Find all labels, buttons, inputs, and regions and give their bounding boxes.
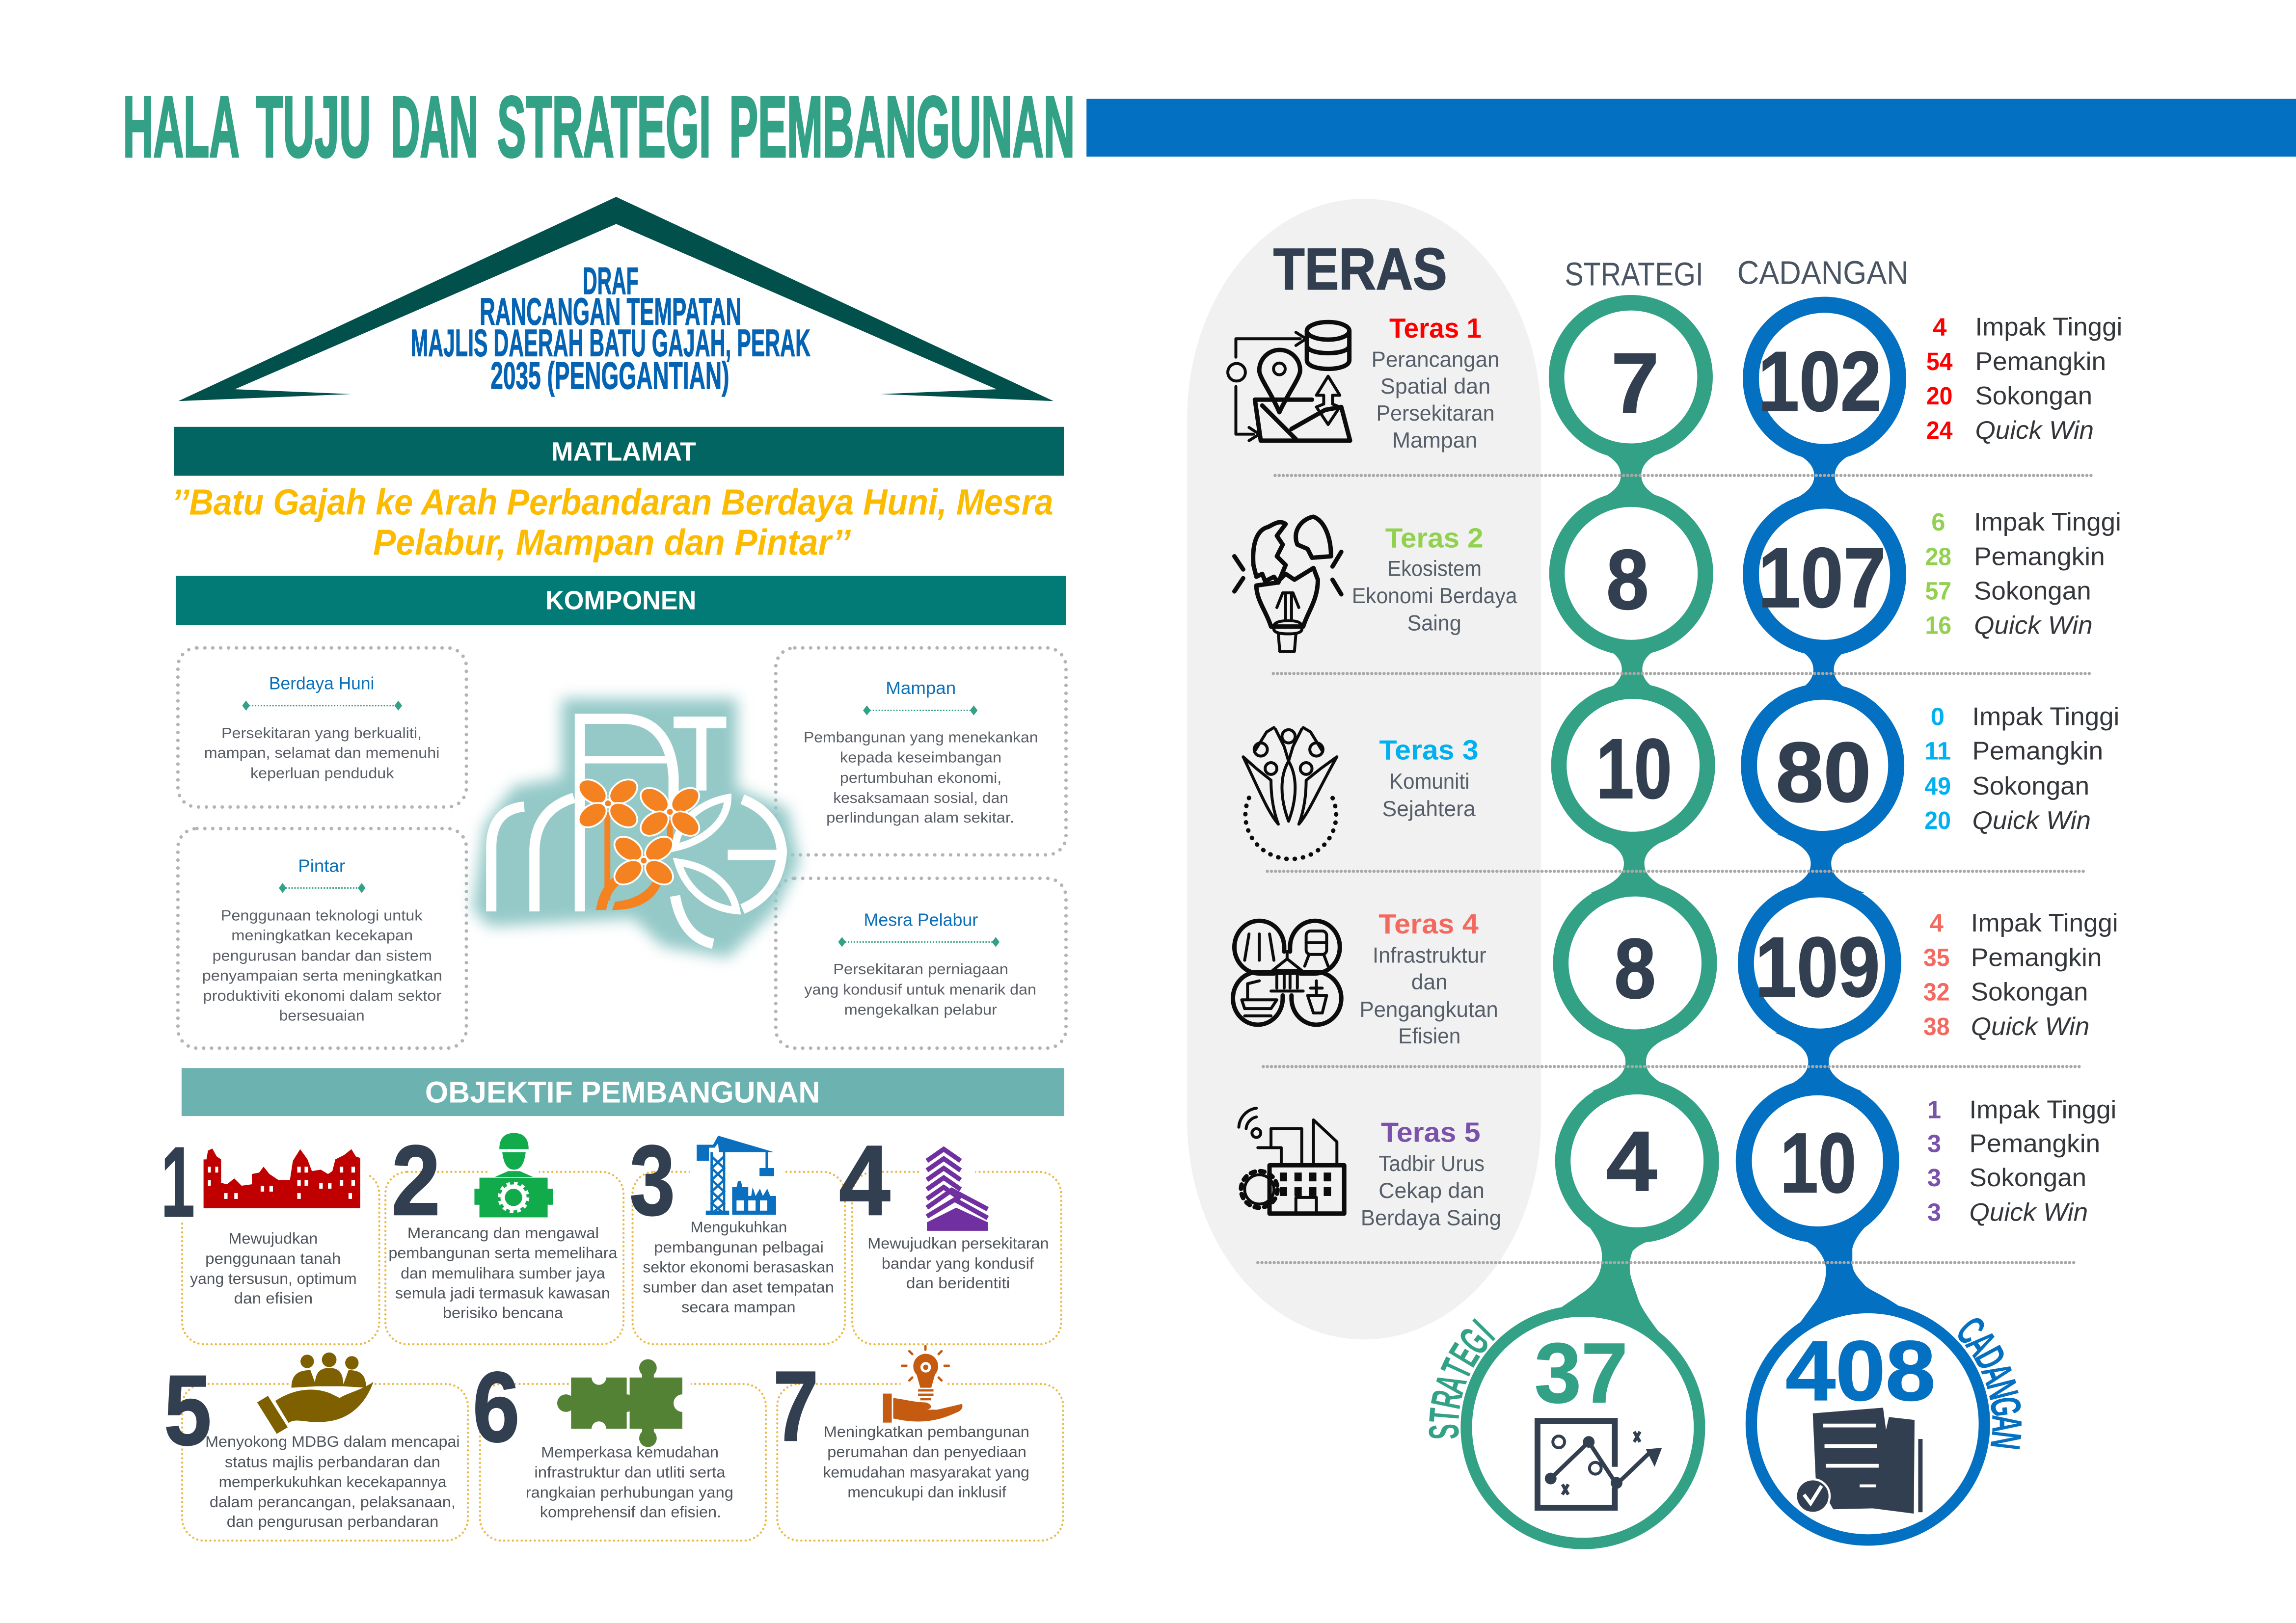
objective 5 text: status majlis perbandaran dan <box>225 1453 440 1470</box>
teras 1 breakdown: Impak Tinggi <box>1975 313 2122 342</box>
card: Mesra Pelabur <box>776 878 1066 1048</box>
teras 2 row: Teras 2 <box>1385 523 1484 554</box>
strategi 7: 7 <box>1611 335 1659 430</box>
teras 1 description <box>1372 347 1499 452</box>
card: Mesra Pelabur: Persekitaran perniagaan <box>833 960 1008 978</box>
objective 2 text: berisiko bencana <box>443 1304 563 1321</box>
teras 1 breakdown: Pemangkin <box>1975 347 2106 376</box>
objective boxes outlines <box>176 1164 1063 1541</box>
icon: planning map <box>1228 322 1350 441</box>
teras 2 breakdown: 6 <box>1931 508 1945 536</box>
teras 5 breakdown <box>1927 1096 2116 1227</box>
curved label strategi: I <box>1465 1311 1503 1349</box>
curved label cadangan: N <box>1981 1429 2030 1452</box>
curved label strategi: A <box>1426 1368 1476 1399</box>
icon: community people <box>1243 727 1337 859</box>
objective 5 text: dan pengurusan perbandaran <box>227 1513 438 1530</box>
objective 7 text: mencukupi dan inklusif <box>847 1483 1006 1501</box>
strategi 8 <box>1561 889 1709 1037</box>
curved label cadangan: A <box>1957 1323 2006 1364</box>
teras 4 description: Infrastruktur <box>1373 943 1486 967</box>
strategi chain <box>1555 303 1711 1332</box>
cadangan column heading: CADANGAN <box>1737 255 1909 292</box>
teras 1 row <box>1228 313 2122 452</box>
roof shape <box>178 197 1053 401</box>
objective 5: 5 <box>164 1354 212 1465</box>
objective 1: 1 <box>161 1126 195 1237</box>
goal quote: Pelabur, Mampan dan Pintar’’ <box>373 522 851 562</box>
curved label cadangan: A <box>1983 1414 2031 1433</box>
teras 5 breakdown: 3 <box>1927 1164 1941 1192</box>
card: Mampan <box>776 648 1066 855</box>
objective 6 text <box>526 1443 733 1520</box>
teras 5 description: Berdaya Saing <box>1361 1206 1501 1230</box>
komponen banner <box>176 576 1066 625</box>
cadangan 109 <box>1746 889 1893 1037</box>
teras 1 description: Perancangan <box>1372 347 1499 372</box>
objective 4 text: bandar yang kondusif <box>882 1254 1034 1272</box>
total cadangan circle: 408 <box>1785 1323 1936 1418</box>
total strategi circle: 37 <box>1535 1325 1628 1420</box>
curved label strategi: G <box>1450 1319 1498 1363</box>
cadangan 80 <box>1749 692 1896 839</box>
objective 4 text: Mewujudkan persekitaran <box>867 1234 1049 1252</box>
objective 5 text: Menyokong MDBG dalam mencapai <box>205 1433 460 1450</box>
objective 4: 4 <box>839 1124 891 1236</box>
main title: STRATEGI <box>497 79 711 175</box>
card: Berdaya Huni: Berdaya Huni <box>269 674 374 693</box>
objective 7 text: Meningkatkan pembangunan <box>824 1423 1029 1440</box>
objective 3 text: pembangunan pelbagai <box>654 1238 824 1256</box>
teras 1 breakdown: Sokongan <box>1975 382 2092 410</box>
teras 2 description <box>1352 556 1517 635</box>
roof heading: 2035 (PENGGANTIAN) <box>490 355 729 397</box>
card: Mesra Pelabur: mengekalkan pelabur <box>844 1001 997 1018</box>
objective 4 <box>839 1124 1049 1292</box>
curved label cadangan: G <box>1981 1394 2030 1419</box>
teras 4 row <box>1233 909 2118 1048</box>
strategi 8: 8 <box>1614 921 1656 1016</box>
total strategi circle <box>1466 1311 1700 1543</box>
teras 1 breakdown: 20 <box>1926 382 1953 410</box>
cadangan 102 <box>1751 305 1898 452</box>
card: Berdaya Huni <box>178 648 466 807</box>
card: Mampan: pertumbuhan ekonomi, <box>840 769 1001 786</box>
objective 1 text: dan efisien <box>234 1289 313 1307</box>
strategi 8: 8 <box>1606 532 1649 627</box>
teras 4 breakdown: Quick Win <box>1971 1012 2089 1041</box>
teras 1 description: Spatial dan <box>1380 374 1490 399</box>
objective 1 text: yang tersusun, optimum <box>190 1270 357 1287</box>
teras 2 breakdown: 16 <box>1925 612 1951 639</box>
teras 4 description: dan <box>1411 970 1448 994</box>
objective 6 text: infrastruktur dan utliti serta <box>534 1463 726 1481</box>
left panel <box>161 197 1066 1541</box>
teras 5 description <box>1361 1151 1501 1230</box>
icon: purple tower <box>927 1149 988 1231</box>
teras 1 description: Persekitaran <box>1377 401 1495 426</box>
teras 4 breakdown: Pemangkin <box>1971 943 2102 972</box>
teras 4 breakdown: 32 <box>1923 978 1950 1006</box>
curved label strategi: E <box>1440 1336 1488 1374</box>
card: Mesra Pelabur: yang kondusif untuk menarik dan <box>804 981 1036 998</box>
teras 2 breakdown: Quick Win <box>1974 612 2093 640</box>
icon: engineer with gear board <box>474 1133 553 1217</box>
matlamat banner: MATLAMAT <box>551 437 696 467</box>
icon: crane and factory <box>697 1136 776 1215</box>
objective 6 text: Memperkasa kemudahan <box>541 1443 719 1461</box>
objective 7 text <box>823 1423 1029 1501</box>
teras 3 breakdown <box>1924 702 2119 835</box>
teras 3 breakdown: Impak Tinggi <box>1972 702 2119 731</box>
cadangan 107 <box>1751 501 1898 648</box>
teras 1 description: Mampan <box>1392 428 1477 452</box>
title blue bar <box>1086 99 2296 157</box>
teras 4 breakdown: 4 <box>1930 909 1944 937</box>
teras 5 description: Tadbir Urus <box>1378 1151 1485 1176</box>
teras 5 description: Cekap dan <box>1378 1178 1485 1203</box>
curved label cadangan <box>1947 1307 2031 1452</box>
teras 1 breakdown: Quick Win <box>1975 416 2094 445</box>
teras 2 breakdown: 57 <box>1925 577 1951 605</box>
curved label strategi: S <box>1420 1423 1468 1440</box>
strategi 10: 10 <box>1596 721 1672 816</box>
objective 4 text <box>867 1234 1049 1292</box>
curved label strategi: R <box>1422 1386 1472 1412</box>
objective 6 text: rangkaian perhubungan yang <box>526 1484 733 1501</box>
teras 2 breakdown: 28 <box>1925 542 1951 570</box>
teras 4 row: Teras 4 <box>1378 909 1479 940</box>
teras 5 breakdown: 3 <box>1927 1129 1941 1157</box>
teras 3 breakdown: Quick Win <box>1972 806 2091 835</box>
teras 1 row: Teras 1 <box>1389 313 1482 344</box>
objective 7 text: kemudahan masyarakat yang <box>823 1463 1029 1481</box>
card: Pintar: Pintar <box>298 856 345 876</box>
objective 5 text: memperkukuhkan kecekapannya <box>219 1473 447 1490</box>
cadangan 10 <box>1744 1087 1891 1234</box>
teras 5 breakdown: 3 <box>1927 1198 1941 1226</box>
objective 7: 7 <box>773 1350 818 1462</box>
teras 4 description: Efisien <box>1398 1024 1460 1048</box>
icon: broken light bulb <box>1234 517 1341 651</box>
teras 1 breakdown <box>1926 313 2122 445</box>
teras 3 breakdown: Sokongan <box>1972 772 2089 800</box>
icon: transport network <box>1233 921 1341 1025</box>
teras 4 description: Pengangkutan <box>1360 997 1498 1022</box>
objective 1 text: Mewujudkan <box>228 1229 318 1247</box>
MDBG logo <box>472 698 800 958</box>
goal quote: ’’Batu Gajah ke Arah Perbandaran Berdaya Huni, Mesra <box>172 482 1053 523</box>
objective 3 text: Mengukuhkan <box>691 1218 787 1236</box>
teras 2 row <box>1234 508 2121 651</box>
teras 4 breakdown: Sokongan <box>1971 978 2088 1006</box>
objective 6 <box>473 1351 733 1520</box>
objective 2 text: semula jadi termasuk kawasan <box>395 1284 610 1302</box>
teras 3 description <box>1382 769 1476 821</box>
teras 5 breakdown: Sokongan <box>1970 1164 2086 1192</box>
main title: TUJU <box>256 79 371 175</box>
objective 4 text: dan beridentiti <box>906 1274 1010 1292</box>
objektif banner <box>182 1068 1064 1116</box>
teras 3 breakdown: 49 <box>1924 772 1951 800</box>
curved label cadangan: N <box>1977 1375 2028 1404</box>
card: Berdaya Huni: mampan, selamat dan memenuhi <box>204 744 439 761</box>
icon: hand with light bulb <box>883 1346 962 1423</box>
objective 2 <box>388 1124 618 1321</box>
teras 3 breakdown: 0 <box>1931 702 1945 730</box>
teras 3 row <box>1243 702 2119 859</box>
curved label cadangan: D <box>1966 1339 2016 1377</box>
roof heading: MAJLIS DAERAH BATU GAJAH, PERAK <box>411 322 810 365</box>
card: Berdaya Huni: keperluan penduduk <box>250 764 394 781</box>
teras 3 description: Sejahtera <box>1382 797 1476 821</box>
icon: red city <box>204 1148 360 1208</box>
teras heading: TERAS <box>1273 237 1447 302</box>
curved label strategi: T <box>1420 1407 1468 1425</box>
cadangan 107: 107 <box>1758 530 1886 625</box>
cadangan 80: 80 <box>1776 724 1871 820</box>
objective 2: 2 <box>392 1124 440 1236</box>
teras 5 row: Teras 5 <box>1381 1117 1481 1148</box>
card: Pintar <box>178 828 466 1048</box>
icon: hand holding people <box>257 1353 374 1434</box>
objective 2 text: pembangunan serta memelihara <box>388 1244 618 1262</box>
right panel <box>1187 199 2122 1543</box>
card: Mampan: kesaksamaan sosial, dan <box>833 789 1008 806</box>
strategi 4: 4 <box>1606 1114 1657 1209</box>
roof heading: RANCANGAN TEMPATAN <box>480 291 741 333</box>
objective 6: 6 <box>473 1351 520 1463</box>
card: Pintar: produktiviti ekonomi dalam sektor <box>203 987 441 1004</box>
card: Pintar: pengurusan bandar dan sistem <box>213 947 432 964</box>
objective 3: 3 <box>630 1124 675 1236</box>
teras 2 description: Saing <box>1407 611 1461 635</box>
card: Pintar: Penggunaan teknologi untuk <box>221 906 423 924</box>
icon: strategy board <box>1538 1421 1662 1508</box>
objective 7 text: perumahan dan penyediaan <box>827 1443 1026 1461</box>
objective 5 text <box>205 1433 460 1530</box>
goal quote <box>172 482 1053 562</box>
card: Pintar: meningkatkan kecekapan <box>231 927 413 944</box>
teras 3 breakdown: 20 <box>1924 806 1951 834</box>
card: Mesra Pelabur: Mesra Pelabur <box>864 910 978 930</box>
objective 3 text: secara mampan <box>681 1298 796 1316</box>
objective 3 text: sumber dan aset tempatan <box>643 1278 834 1296</box>
strategi 8 <box>1557 499 1705 648</box>
curved label cadangan: A <box>1972 1357 2023 1390</box>
strategi 10 <box>1559 691 1707 840</box>
teras 5 breakdown: 1 <box>1927 1096 1941 1124</box>
curved label strategi: T <box>1432 1353 1481 1385</box>
teras 2 breakdown: Sokongan <box>1974 577 2091 605</box>
teras 4 breakdown: 35 <box>1923 943 1950 971</box>
cadangan 102: 102 <box>1758 334 1882 429</box>
card: Mampan: Pembangunan yang menekankan <box>804 728 1038 745</box>
teras 2 breakdown <box>1925 508 2121 640</box>
objective 7 <box>773 1346 1029 1501</box>
main title <box>123 79 1075 175</box>
teras 1 breakdown: 4 <box>1933 313 1946 341</box>
curved label strategi <box>1420 1311 1503 1440</box>
teras 2 breakdown: Pemangkin <box>1974 542 2105 571</box>
objective 1 <box>161 1126 360 1307</box>
card: Mampan: perlindungan alam sekitar. <box>826 809 1014 826</box>
icon: puzzle pieces <box>557 1359 691 1447</box>
objective 5 text: dalam perancangan, pelaksanaan, <box>210 1493 456 1511</box>
objective 5 <box>164 1353 460 1530</box>
objective 3 text <box>643 1218 834 1316</box>
komponen banner: KOMPONEN <box>545 586 696 615</box>
total cadangan circle <box>1751 1307 1984 1540</box>
card: Berdaya Huni: Persekitaran yang berkualiti, <box>221 724 422 742</box>
objective 2 text <box>388 1224 618 1321</box>
card: Mampan: kepada keseimbangan <box>840 749 1001 766</box>
teras 2 breakdown: Impak Tinggi <box>1974 508 2121 536</box>
icon: smart government building <box>1239 1108 1344 1214</box>
teras 3 breakdown: Pemangkin <box>1972 737 2103 765</box>
teras 4 breakdown: 38 <box>1923 1012 1950 1040</box>
teras 2 description: Ekonomi Berdaya <box>1352 584 1517 608</box>
icon: documents with check <box>1796 1408 1922 1514</box>
objective 3 <box>630 1124 834 1316</box>
main title: DAN <box>391 79 478 175</box>
main title: PEMBANGUNAN <box>729 79 1075 175</box>
teras 5 breakdown: Impak Tinggi <box>1970 1096 2116 1124</box>
objective 6 text: komprehensif dan efisien. <box>540 1503 721 1520</box>
teras 3 breakdown: 11 <box>1924 737 1951 765</box>
objective 2 text: dan memulihara sumber jaya <box>401 1264 605 1282</box>
strategi 4 <box>1563 1087 1711 1235</box>
objektif banner: OBJEKTIF PEMBANGUNAN <box>425 1076 820 1109</box>
teras 5 breakdown: Quick Win <box>1970 1198 2088 1227</box>
main title: HALA <box>123 79 240 175</box>
teras 3 description: Komuniti <box>1389 769 1470 794</box>
cadangan 10: 10 <box>1780 1115 1856 1210</box>
teras 1 breakdown: 54 <box>1926 347 1953 375</box>
teras 2 description: Ekosistem <box>1387 556 1482 581</box>
cadangan 109: 109 <box>1755 919 1880 1014</box>
objective 2 text: Merancang dan mengawal <box>407 1224 599 1242</box>
curved label cadangan: C <box>1947 1307 1995 1353</box>
card: Pintar: bersesuaian <box>279 1007 365 1024</box>
card: Pintar: penyampaian serta meningkatkan <box>202 967 442 984</box>
matlamat banner <box>174 427 1064 476</box>
card: Mampan: Mampan <box>886 678 956 698</box>
strategi 7 <box>1557 303 1705 451</box>
roof heading <box>411 260 810 397</box>
objective 3 text: sektor ekonomi berasaskan <box>643 1258 834 1276</box>
objective 1 text <box>190 1229 357 1307</box>
teras 5 breakdown: Pemangkin <box>1970 1129 2100 1158</box>
teras 4 description <box>1360 943 1498 1048</box>
teras grey pill <box>1187 199 1541 1339</box>
cadangan chain <box>1744 305 1901 1329</box>
teras 1 breakdown: 24 <box>1926 416 1953 444</box>
teras 3 row: Teras 3 <box>1379 735 1479 766</box>
objective 1 text: penggunaan tanah <box>205 1250 341 1267</box>
strategi column heading: STRATEGI <box>1565 257 1703 293</box>
teras 5 row <box>1239 1096 2116 1230</box>
teras 4 breakdown <box>1923 909 2118 1041</box>
roof heading: DRAF <box>583 260 638 302</box>
teras 4 breakdown: Impak Tinggi <box>1971 909 2118 937</box>
